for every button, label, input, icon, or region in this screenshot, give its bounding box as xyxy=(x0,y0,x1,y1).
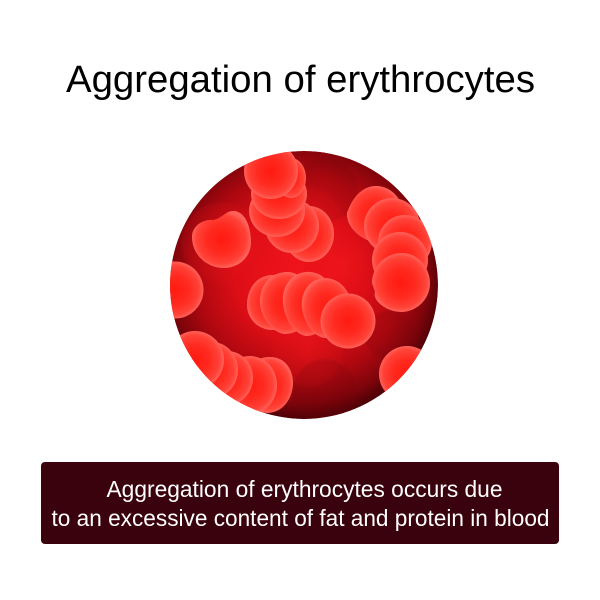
stack: bottom left xyxy=(180,331,293,413)
title: Aggregation of erythrocytes xyxy=(66,59,535,101)
vessel background xyxy=(170,151,438,419)
cell: left edge xyxy=(170,262,204,318)
caption panel xyxy=(41,462,559,544)
cell: single left xyxy=(192,211,251,268)
caption line 2: to an excessive content of fat and protein in blood xyxy=(52,505,550,531)
illustration: erythrocytes in a blood vessel xyxy=(170,151,438,419)
blurred background cells xyxy=(180,156,416,426)
stack: right xyxy=(347,186,432,312)
stack: top xyxy=(244,143,334,262)
stack: middle xyxy=(247,272,376,348)
caption line 1: Aggregation of erythrocytes occurs due xyxy=(106,476,502,502)
cell: lower right xyxy=(379,346,422,392)
